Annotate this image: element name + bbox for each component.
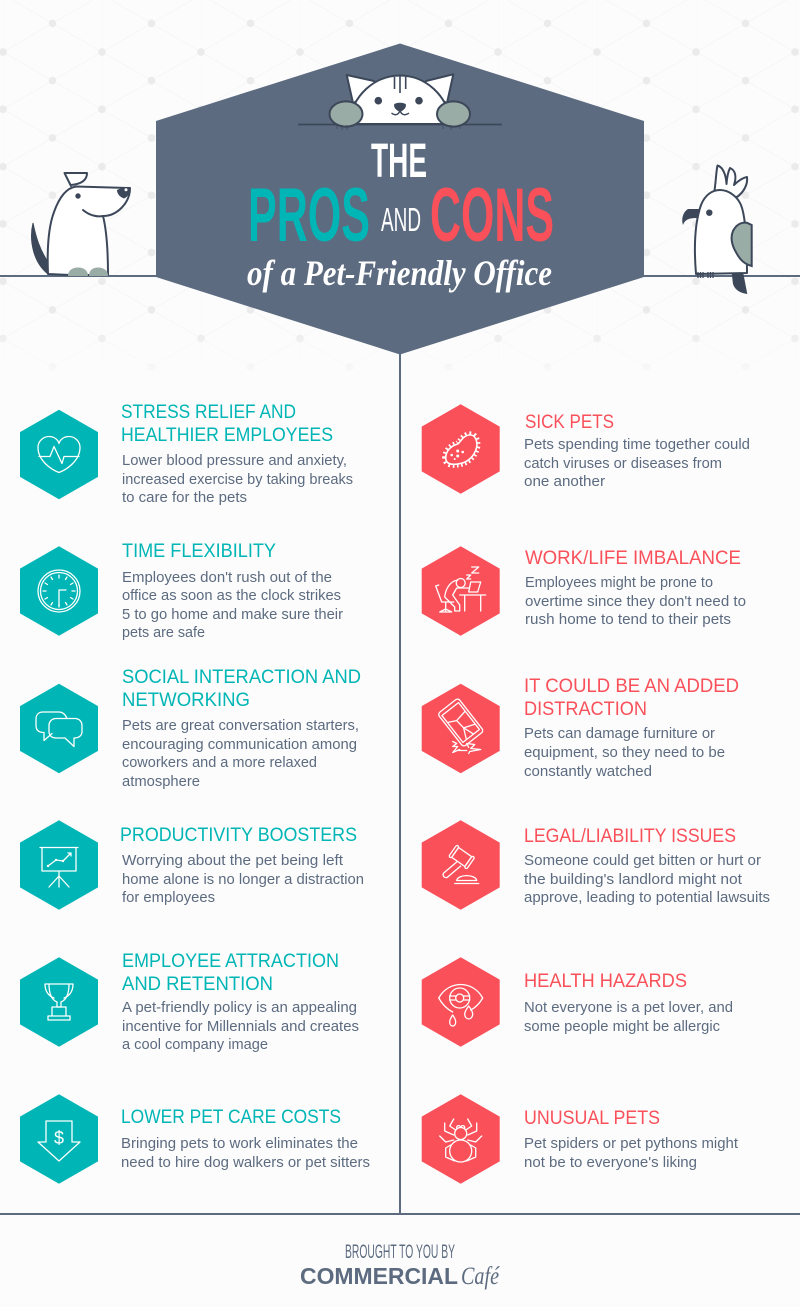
heading: EMPLOYEE ATTRACTION <box>122 951 339 972</box>
title: pros: PROS <box>248 173 370 258</box>
heading: NETWORKING <box>122 690 250 711</box>
body text: one another <box>524 473 605 490</box>
title: the: THE <box>371 135 427 188</box>
heading: TIME FLEXIBILITY <box>122 541 276 562</box>
body text: Pets are great conversation starters, <box>122 717 359 734</box>
body text: equipment, so they need to be <box>524 744 725 761</box>
body text: not be to everyone's liking <box>524 1154 697 1171</box>
body text: rush home to tend to their pets <box>525 611 731 628</box>
heading: LEGAL/LIABILITY ISSUES <box>524 826 736 847</box>
hexagon icon: sleeping worker <box>422 546 500 636</box>
logo: commercial: COMMERCIAL <box>300 1263 458 1289</box>
panel: con 5 health hazards <box>422 957 733 1047</box>
heading: SICK PETS <box>525 412 614 433</box>
body text: increased exercise by taking breaks <box>122 471 353 488</box>
body text: the building's landlord might not <box>524 871 743 888</box>
body text: some people might be allergic <box>524 1018 720 1035</box>
body text: overtime since they don't need to <box>525 593 746 610</box>
hexagon icon: speech bubbles <box>20 684 98 773</box>
body text: atmosphere <box>122 773 200 790</box>
body text: Worrying about the pet being left <box>122 852 344 869</box>
heading: IT COULD BE AN ADDED <box>524 676 739 697</box>
body text: for employees <box>122 889 215 906</box>
body text: encouraging communication among <box>122 736 357 753</box>
heading: WORK/LIFE IMBALANCE <box>525 548 741 569</box>
title: and: AND <box>381 201 421 238</box>
body text: home alone is no longer a distraction <box>122 871 364 888</box>
hexagon icon: clock <box>20 546 98 636</box>
body text: Someone could get bitten or hurt or <box>524 852 761 869</box>
hexagon icon: bacterium <box>422 404 500 494</box>
hexagon icon: dollar down arrow: $ <box>54 1128 64 1148</box>
panel: pro 1 stress relief <box>20 402 353 506</box>
heading: STRESS RELIEF AND <box>121 402 296 423</box>
panel: con 1 sick pets <box>422 404 750 494</box>
panel: pro 5 employee attraction <box>20 951 359 1053</box>
body text: catch viruses or diseases from <box>524 455 722 472</box>
body text: Pets can damage furniture or <box>524 725 715 742</box>
hexagon icon: broken phone <box>422 684 500 773</box>
icon: cat peeking over ledge <box>298 74 502 130</box>
header hexagon <box>156 44 644 354</box>
panel: pro 6 lower pet care costs <box>20 1094 370 1184</box>
body text: constantly watched <box>524 763 652 780</box>
logo: cafe: Café <box>461 1263 500 1290</box>
panel: pro 4 productivity <box>20 820 364 910</box>
body text: Lower blood pressure and anxiety, <box>122 452 347 469</box>
heading: AND RETENTION <box>122 974 273 995</box>
hexagon icon: dollar down arrow <box>20 1094 98 1184</box>
heading: HEALTHIER EMPLOYEES <box>121 425 333 446</box>
hexagon icon: gavel <box>422 820 500 910</box>
heading: HEALTH HAZARDS <box>524 971 687 992</box>
heading: UNUSUAL PETS <box>524 1108 660 1129</box>
body text: 5 to go home and make sure their <box>122 606 343 623</box>
body text: Bringing pets to work eliminates the <box>121 1135 358 1152</box>
body text: coworkers and a more relaxed <box>122 754 317 771</box>
panel: con 6 unusual pets <box>422 1094 739 1184</box>
hexagon icon: presentation board <box>20 820 98 910</box>
panel: con 2 work life imbalance <box>422 546 746 636</box>
panel: con 4 legal liability <box>422 820 770 910</box>
hexagon icon: heart <box>20 410 98 499</box>
body text: incentive for Millennials and creates <box>122 1018 359 1035</box>
heading: LOWER PET CARE COSTS <box>121 1107 341 1128</box>
footer credit <box>300 1242 500 1290</box>
body text: approve, leading to potential lawsuits <box>524 889 770 906</box>
hexagon icon: teary eye <box>422 957 500 1047</box>
body text: Pet spiders or pet pythons might <box>524 1135 739 1152</box>
heading: DISTRACTION <box>524 699 647 720</box>
body text: need to hire dog walkers or pet sitters <box>121 1154 370 1171</box>
hexagon icon: trophy <box>20 957 98 1047</box>
body text: Employees don't rush out of the <box>122 569 332 586</box>
body text: pets are safe <box>122 624 205 641</box>
panel: pro 2 time flexibility <box>20 541 343 641</box>
heading: PRODUCTIVITY BOOSTERS <box>120 825 357 846</box>
body text: Pets spending time together could <box>524 436 750 453</box>
body text: Not everyone is a pet lover, and <box>524 999 733 1016</box>
panel: pro 3 social interaction <box>20 667 361 790</box>
credit line: BROUGHT TO YOU BY <box>345 1242 455 1263</box>
heading: SOCIAL INTERACTION AND <box>122 667 361 688</box>
subtitle: of a Pet-Friendly Office <box>247 253 552 293</box>
body text: office as soon as the clock strikes <box>122 587 341 604</box>
icon: dog <box>32 173 131 276</box>
panel: con 3 added distraction <box>422 676 739 780</box>
body text: to care for the pets <box>122 489 247 506</box>
icon: cockatoo <box>682 166 752 294</box>
title: cons: CONS <box>430 173 554 258</box>
hexagon icon: spider <box>422 1094 500 1184</box>
body text: a cool company image <box>122 1036 268 1053</box>
body text: Employees might be prone to <box>525 574 713 591</box>
body text: A pet-friendly policy is an appealing <box>122 999 357 1016</box>
